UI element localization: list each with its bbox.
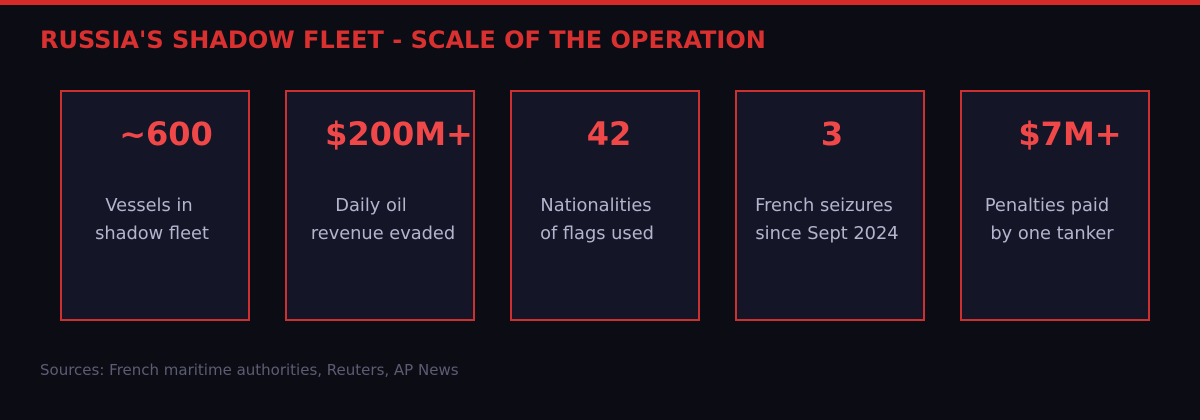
stat numbers: 3 bbox=[821, 115, 843, 153]
stat numbers: Nationalities bbox=[540, 195, 652, 216]
stat numbers: Daily oil bbox=[335, 195, 407, 216]
panel: seizures bbox=[735, 90, 925, 321]
stat numbers: revenue evaded bbox=[311, 223, 455, 244]
top bar bbox=[0, 0, 1200, 5]
stat numbers: ~600 bbox=[119, 115, 213, 153]
stat numbers: $7M+ bbox=[1018, 115, 1122, 153]
stat numbers: by one tanker bbox=[990, 223, 1114, 244]
stat numbers: Penalties paid bbox=[985, 195, 1109, 216]
panel: vessels bbox=[60, 90, 250, 321]
stat numbers: since Sept 2024 bbox=[755, 223, 899, 244]
panel: flags bbox=[510, 90, 700, 321]
sources: Sources: French maritime authorities, Reuters, AP News bbox=[40, 361, 459, 379]
stat numbers: 42 bbox=[587, 115, 631, 153]
stat numbers: $200M+ bbox=[325, 115, 473, 153]
stat numbers bbox=[95, 115, 1122, 244]
stat numbers: Vessels in bbox=[105, 195, 193, 216]
panel: penalties bbox=[960, 90, 1150, 321]
stat numbers: shadow fleet bbox=[95, 223, 209, 244]
title: RUSSIA'S SHADOW FLEET - SCALE OF THE OPERATION bbox=[40, 26, 766, 54]
panel: revenue bbox=[285, 90, 475, 321]
stat numbers: of flags used bbox=[540, 223, 654, 244]
stat numbers: French seizures bbox=[755, 195, 893, 216]
